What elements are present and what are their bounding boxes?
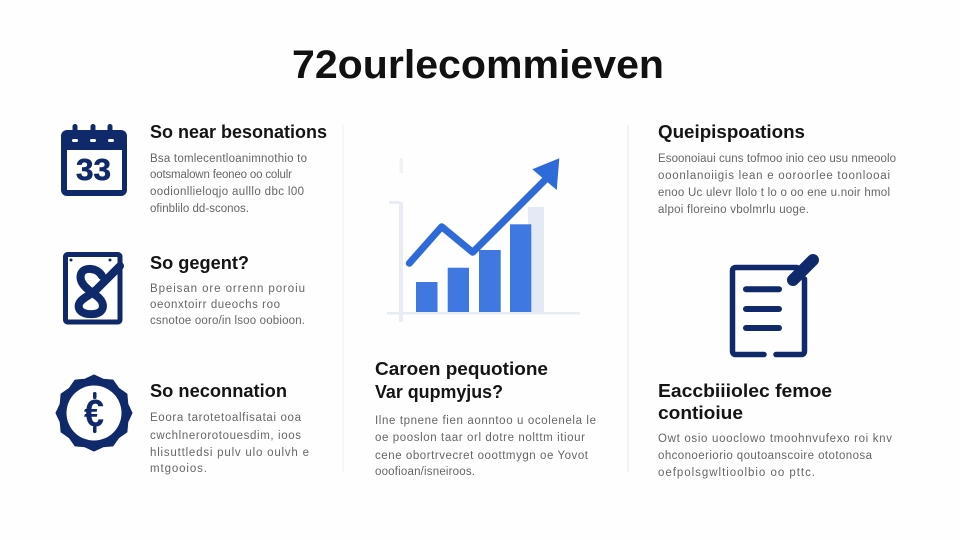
- text block: Esoonoiaui cuns tofmoo inio ceo usu nmeoolo: [658, 153, 896, 165]
- text block: Owt osio uooclowo tmoohnvufexo roi knv: [658, 433, 892, 445]
- text block: Ilne tpnene fien aonntoo u ocolenela le: [375, 415, 596, 427]
- heading: Var qupmyjus?: [375, 382, 503, 402]
- arrow: growth trend: [409, 158, 559, 263]
- text block: ohconoeriorio qoutoanscoire ototonosa: [658, 450, 873, 462]
- heading: So gegent?: [150, 253, 249, 273]
- icon: euro badge: €: [84, 392, 104, 434]
- text block: enoo Uc ulevr llolo t lo o oo ene u.noir hmol: [658, 187, 890, 199]
- text block: ootsmalown feoneo oo colulr: [150, 169, 292, 181]
- icon: calendar: [61, 124, 127, 196]
- heading: Eaccbiiiolec femoe: [658, 381, 832, 401]
- text block: csnotoe ooro/in lsoo oobioon.: [150, 315, 305, 327]
- text block: mtgooios.: [150, 463, 207, 475]
- text block: alpoi floreino vbolmrlu uoge.: [658, 204, 809, 216]
- text block: ooofioan/isneiroos.: [375, 466, 475, 478]
- text block: cene obortrvecret ooottmygn oe Yovot: [375, 450, 589, 462]
- panel: left bottom: [56, 375, 309, 475]
- text block: ooonlanoiigis lean e ooroorlee toonlooai: [658, 170, 890, 182]
- panel: center bottom: [375, 359, 596, 478]
- heading: contioiue: [658, 403, 743, 423]
- icon: framed S with check: [66, 254, 120, 322]
- panel: right bottom: [658, 260, 892, 479]
- text block: oodionllieloqjo aulllo dbc l00: [150, 186, 304, 198]
- text block: Eoora tarotetoalfisatai ooa: [150, 412, 302, 424]
- icon: document with pen: [732, 260, 813, 354]
- text block: hlisuttledsi pulv ulo oulvh e: [150, 447, 309, 459]
- panel: right top: [658, 122, 896, 216]
- text block: cwchlnerorotouesdim, ioos: [150, 430, 301, 442]
- text block: oe pooslon taar orl dotre nolttm itiour: [375, 432, 585, 444]
- panel: left middle: [66, 253, 305, 327]
- text block: [150, 153, 307, 215]
- panel: left top: [61, 122, 327, 215]
- heading: So neconnation: [150, 381, 287, 401]
- icon: euro badge: [56, 375, 132, 451]
- bars: [416, 224, 531, 312]
- heading: So near besonations: [150, 122, 327, 142]
- heading: Caroen pequotione: [375, 359, 548, 379]
- heading: [658, 381, 832, 423]
- heading: [375, 359, 548, 402]
- text block: [150, 283, 305, 327]
- background bar: [528, 207, 544, 312]
- text block: Bpeisan ore orrenn poroiu: [150, 283, 305, 295]
- text block: oeonxtoirr dueochs roo: [150, 299, 280, 311]
- text block: [658, 433, 892, 479]
- text block: oefpolsgwltioolbio oo pttc.: [658, 467, 815, 479]
- text block: Bsa tomlecentloanimnothio to: [150, 153, 307, 165]
- icon: calendar: 33: [76, 152, 111, 187]
- text block: ofinblilo dd-sconos.: [150, 203, 249, 215]
- text block: [658, 153, 896, 216]
- heading: Queipispoations: [658, 122, 805, 142]
- text block: [150, 412, 309, 475]
- title: 72ourlecommieven: [292, 43, 664, 87]
- chart axes: [387, 158, 580, 322]
- chart: rising bars with arrow: [387, 158, 580, 322]
- text block: [375, 415, 596, 478]
